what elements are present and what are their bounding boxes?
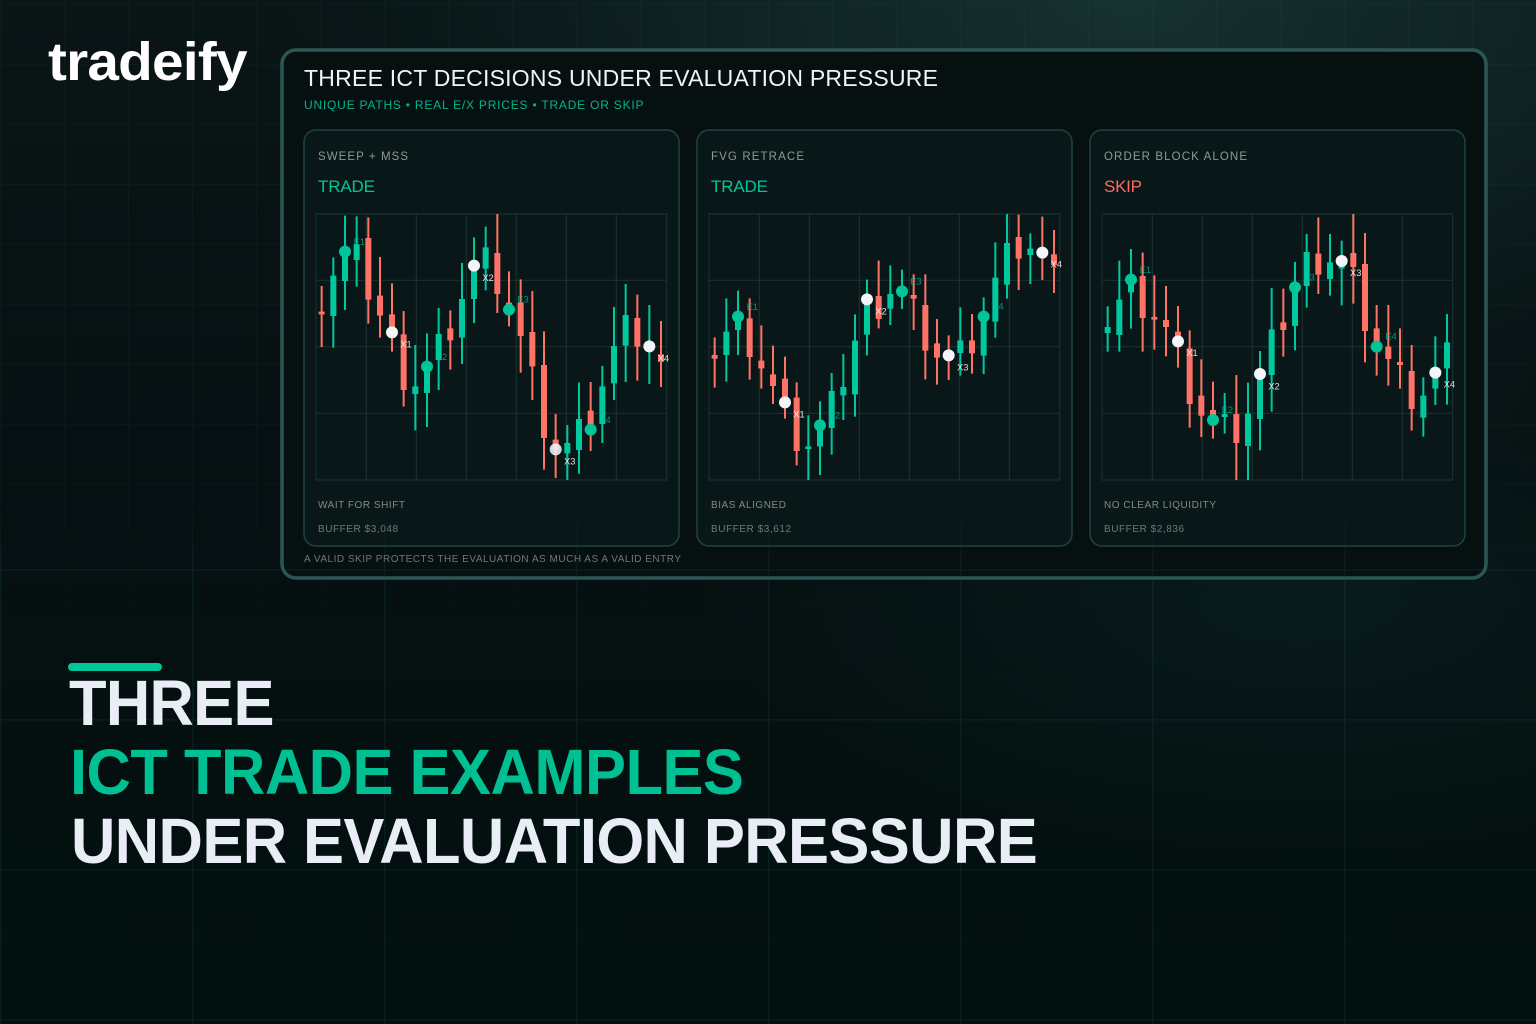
entry and exit markers: E3	[1303, 272, 1315, 282]
panel subtitle: UNIQUE PATHS • REAL E/X PRICES • TRADE OR SKIP	[304, 98, 644, 112]
entry and exit markers: E3	[910, 276, 922, 286]
card buffer: BUFFER $2,836	[1104, 524, 1184, 535]
panel footnote: A VALID SKIP PROTECTS THE EVALUATION AS MUCH AS A VALID ENTRY	[304, 554, 681, 565]
logo: tradeify: tradeify	[48, 31, 248, 92]
entry and exit markers: E1	[747, 302, 758, 312]
card label: ORDER BLOCK ALONE	[1104, 151, 1247, 163]
page background	[0, 0, 1536, 710]
entry and exit markers: E2	[436, 352, 447, 362]
headline line 1: THREE	[69, 668, 274, 739]
candles	[322, 214, 661, 480]
card buffer: BUFFER $3,612	[711, 524, 791, 535]
entry and exit markers: X3	[1350, 268, 1361, 278]
panel: three ICT decisions	[282, 50, 1486, 578]
entry and exit markers: X4	[1444, 379, 1455, 389]
entry and exit markers: X3	[957, 363, 968, 373]
entry and exit markers	[1125, 255, 1455, 426]
entry and exit markers: X1	[400, 340, 412, 350]
entry and exit markers	[339, 237, 669, 466]
card note: BIAS ALIGNED	[711, 500, 786, 511]
entry and exit markers: E1	[354, 237, 365, 247]
headline line 2: ICT TRADE EXAMPLES	[70, 737, 744, 808]
entry and exit markers: E4	[992, 302, 1004, 312]
card note: WAIT FOR SHIFT	[318, 500, 405, 511]
entry and exit markers: X1	[793, 409, 805, 419]
card: FVG retrace	[697, 130, 1072, 546]
entry and exit markers: E1	[1140, 265, 1151, 275]
candles	[1108, 214, 1447, 480]
entry and exit markers: E3	[517, 295, 529, 305]
decision: trade: TRADE	[318, 177, 375, 196]
entry and exit markers: E4	[599, 415, 611, 425]
entry and exit markers: X2	[875, 307, 887, 317]
entry and exit markers: X4	[1051, 260, 1062, 270]
card buffer: BUFFER $3,048	[318, 524, 398, 535]
entry and exit markers: E2	[1222, 405, 1233, 415]
card: order block alone	[1090, 130, 1465, 546]
headline line 3: UNDER EVALUATION PRESSURE	[71, 806, 1038, 877]
candlestick chart: FVG retrace	[709, 214, 1062, 480]
entry and exit markers	[732, 247, 1062, 431]
candlestick chart: sweep + MSS	[316, 214, 669, 480]
card label: FVG RETRACE	[711, 151, 804, 163]
card label: SWEEP + MSS	[318, 151, 408, 163]
candlestick chart: order block alone	[1102, 214, 1455, 480]
accent bar	[68, 663, 162, 671]
entry and exit markers: E4	[1385, 332, 1397, 342]
candles	[715, 214, 1054, 480]
entry and exit markers: X2	[1268, 381, 1280, 391]
entry and exit markers: X4	[658, 353, 669, 363]
entry and exit markers: X3	[564, 456, 575, 466]
decision: trade: TRADE	[711, 177, 768, 196]
entry and exit markers: E2	[829, 410, 840, 420]
card: sweep + MSS	[304, 130, 679, 546]
entry and exit markers: X2	[482, 273, 494, 283]
card note: NO CLEAR LIQUIDITY	[1104, 500, 1216, 511]
headline	[69, 668, 1038, 877]
panel title: THREE ICT DECISIONS UNDER EVALUATION PRESSURE	[304, 65, 938, 91]
entry and exit markers: X1	[1186, 348, 1198, 358]
decision: skip: SKIP	[1104, 177, 1142, 196]
